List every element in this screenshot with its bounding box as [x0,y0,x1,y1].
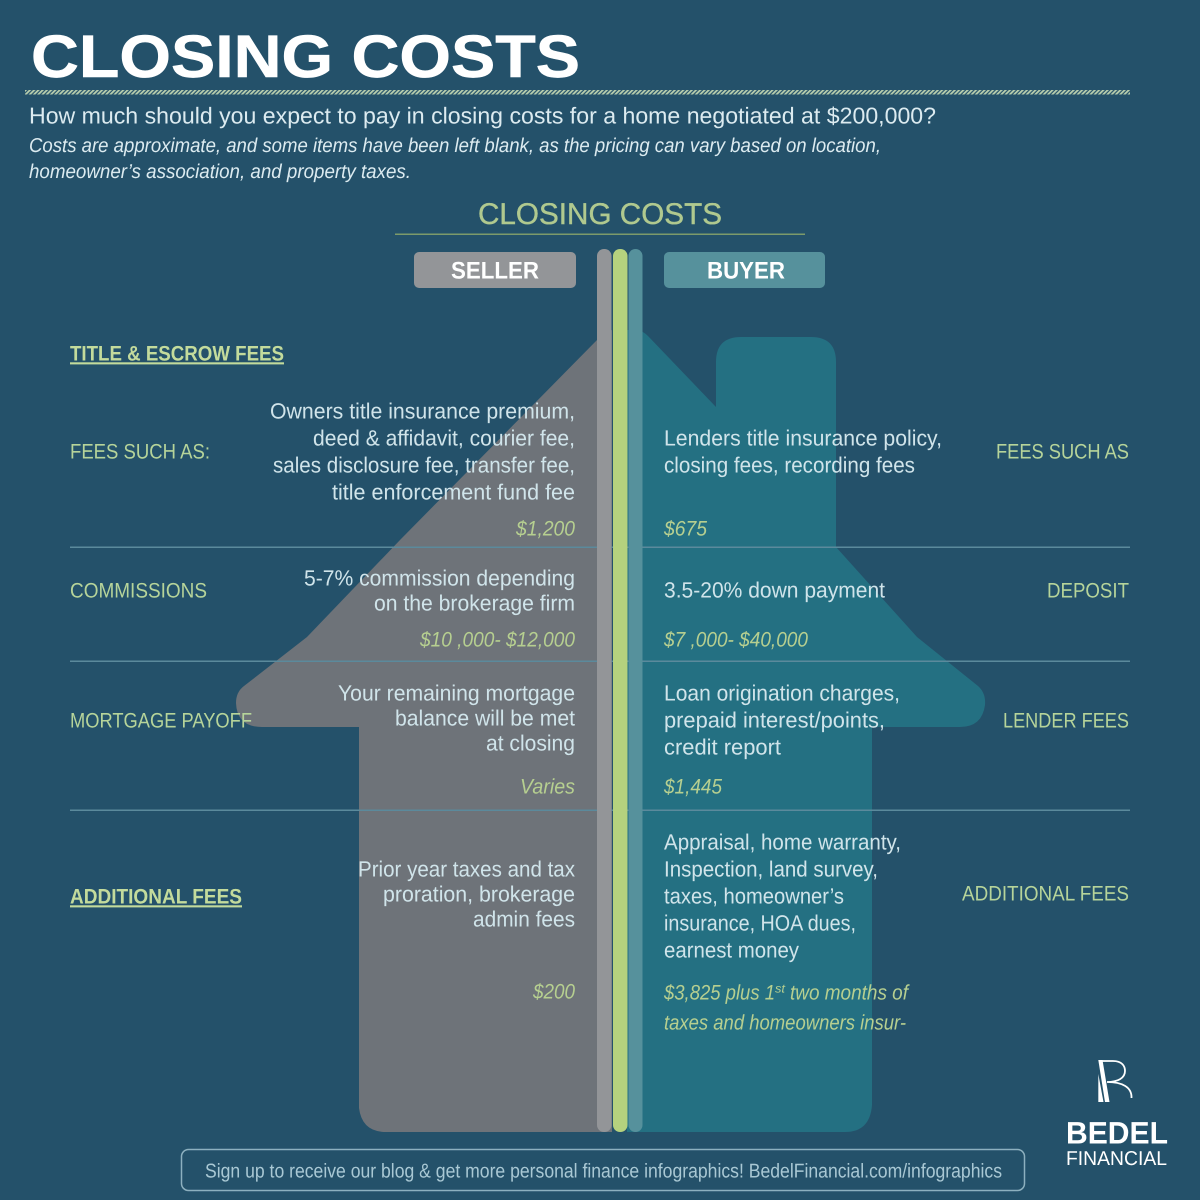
seller: mortgage payoff: Your remaining mortgage [338,680,575,705]
buyer: additional fees [663,829,910,1034]
buyer: lender fees: prepaid interest/points, [664,707,885,732]
intro text: How much should you expect to pay in closing costs for a home negotiated at $200,000? [29,102,936,128]
seller: title and escrow: title enforcement fund fee [332,479,575,504]
seller: title and escrow [270,398,575,540]
buyer: lender fees: Loan origination charges, [664,680,900,705]
row labels: left: FEES SUCH AS: [70,440,210,463]
buyer: additional fees: taxes, homeowner’s [664,883,844,908]
buyer: title and escrow: Lenders title insurance policy, [664,425,942,450]
intro text [29,102,936,183]
row labels: left: MORTGAGE PAYOFF [70,709,252,732]
logo: Bedel Financial [1066,1060,1168,1170]
buyer: title and escrow [663,425,942,540]
buyer: additional fees: $3,825 plus 1 [663,982,775,1004]
buyer: title and escrow: closing fees, recording fees [664,452,915,477]
seller: additional fees [358,856,575,1004]
logo: Bedel Financial: FINANCIAL [1066,1148,1167,1170]
seller header: SELLER [451,258,539,284]
house: buyer half [627,330,985,1132]
title rule [25,90,1130,94]
buyer header: BUYER [707,258,785,284]
row labels: left: ADDITIONAL FEES [70,885,242,908]
buyer: lender fees: $1,445 [663,776,722,798]
buyer: additional fees: Appraisal, home warranty, [664,829,901,854]
chart heading: CLOSING COSTS [478,198,722,231]
row labels: right: DEPOSIT [1047,579,1129,602]
seller: title and escrow: $1,200 [515,518,575,540]
row labels: left: TITLE & ESCROW FEES [70,342,284,365]
seller: mortgage payoff [338,680,575,798]
seller: additional fees: $200 [532,980,575,1004]
intro text: homeowner’s association, and property taxes. [29,161,411,183]
row labels: right [962,440,1129,905]
title: CLOSING COSTS [31,23,580,90]
seller: additional fees: Prior year taxes and tax [358,856,575,881]
seller: mortgage payoff: at closing [486,730,575,755]
seller header [414,252,576,288]
seller: additional fees: admin fees [473,906,575,931]
centre bars [597,249,642,1132]
buyer: deposit: $7 ,000- $40,000 [663,628,808,652]
seller: title and escrow: deed & affidavit, courier fee, [313,425,575,450]
row labels: right: LENDER FEES [1003,709,1129,732]
seller: title and escrow: Owners title insurance premium, [270,398,575,423]
seller: mortgage payoff: balance will be met [395,705,575,730]
buyer: additional fees: insurance, HOA dues, [664,910,856,935]
buyer: additional fees: Inspection, land survey, [664,856,878,881]
row labels: left [70,342,284,908]
buyer header [664,252,825,288]
footer callout: Sign up to receive our blog & get more personal finance infographics! BedelFinancial.com/infographics [205,1160,1002,1182]
buyer: deposit [663,577,885,652]
seller: commissions [304,565,575,652]
seller: commissions: $10 ,000- $12,000 [419,628,575,652]
row labels: right: ADDITIONAL FEES [962,882,1129,905]
buyer: additional fees: earnest money [664,937,799,962]
buyer: additional fees: two months of [790,982,910,1004]
buyer: lender fees: credit report [664,734,781,759]
seller: title and escrow: sales disclosure fee, transfer fee, [273,452,575,477]
seller: mortgage payoff: Varies [520,776,575,798]
buyer: additional fees: taxes and homeowners insur- [664,1012,906,1034]
row labels: right: FEES SUCH AS [996,440,1129,463]
logo: Bedel Financial: BEDEL [1066,1116,1168,1150]
intro text: Costs are approximate, and some items have been left blank, as the pricing can vary based on location, [29,135,881,157]
seller: additional fees: proration, brokerage [383,881,575,906]
seller: commissions: 5-7% commission depending [304,565,575,590]
buyer: deposit: 3.5-20% down payment [664,577,885,602]
house: seller half [236,330,612,1132]
buyer: additional fees: st [775,982,786,996]
seller: commissions: on the brokerage firm [374,590,575,615]
buyer: lender fees [663,680,900,798]
row labels: left: COMMISSIONS [70,579,207,602]
footer callout [182,1150,1024,1190]
buyer: title and escrow: $675 [663,518,707,540]
